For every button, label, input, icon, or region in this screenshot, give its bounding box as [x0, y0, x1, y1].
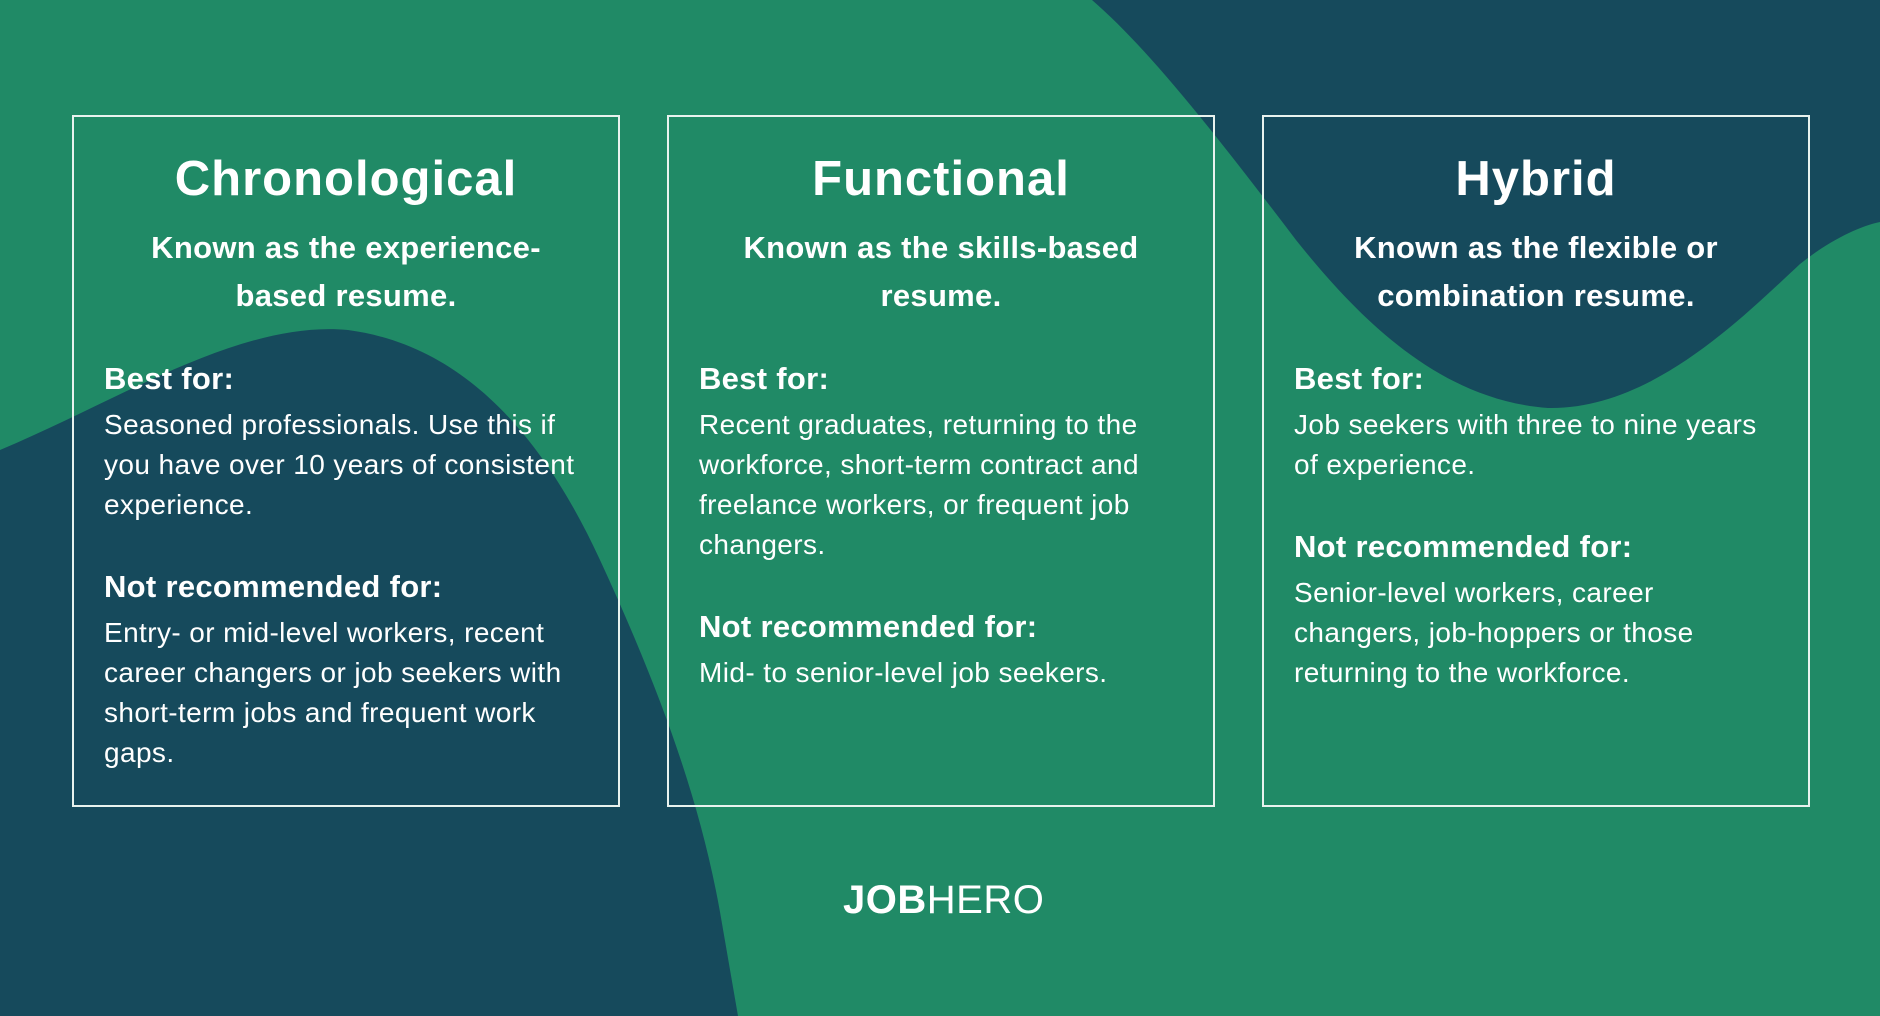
best for block: Seasoned professionals. Use this if you have over 10 years of consistent experience.: [104, 409, 574, 520]
not recommended block: Not recommended for:: [104, 569, 442, 604]
best for block: Job seekers with three to nine years of experience.: [1294, 409, 1757, 480]
best for block: Best for:: [699, 361, 829, 396]
heading: chronological: Chronological: [175, 152, 517, 206]
not recommended block: Mid- to senior-level job seekers.: [699, 657, 1107, 688]
best for block: [104, 361, 574, 520]
not recommended block: Not recommended for:: [699, 609, 1037, 644]
not recommended block: [699, 609, 1107, 688]
best for block: [1294, 361, 1757, 480]
not recommended block: Entry- or mid-level workers, recent career changers or job seekers with short-term jobs and frequent work gaps.: [104, 617, 562, 768]
panel: functional: [667, 115, 1215, 807]
not recommended block: [1294, 529, 1694, 688]
heading: hybrid: Hybrid: [1455, 152, 1617, 206]
dark blob left: [0, 329, 738, 1016]
logo: JOBHERO: JOBHERO: [843, 878, 1044, 922]
panel: chronological: [72, 115, 620, 807]
subtitle: Known as the flexible or combination resume.: [1354, 230, 1718, 313]
dark blob top right: [1092, 0, 1880, 408]
not recommended block: Senior-level workers, career changers, job-hoppers or those returning to the workforce.: [1294, 577, 1694, 688]
not recommended block: Not recommended for:: [1294, 529, 1632, 564]
subtitle: Known as the experience-based resume.: [151, 230, 541, 313]
best for block: Best for:: [1294, 361, 1424, 396]
subtitle: Known as the skills-based resume.: [743, 230, 1139, 313]
heading: functional: Functional: [812, 152, 1070, 206]
best for block: Recent graduates, returning to the workforce, short-term contract and freelance workers, or frequent job changers.: [699, 409, 1139, 560]
panel: hybrid: [1262, 115, 1810, 807]
best for block: Best for:: [104, 361, 234, 396]
